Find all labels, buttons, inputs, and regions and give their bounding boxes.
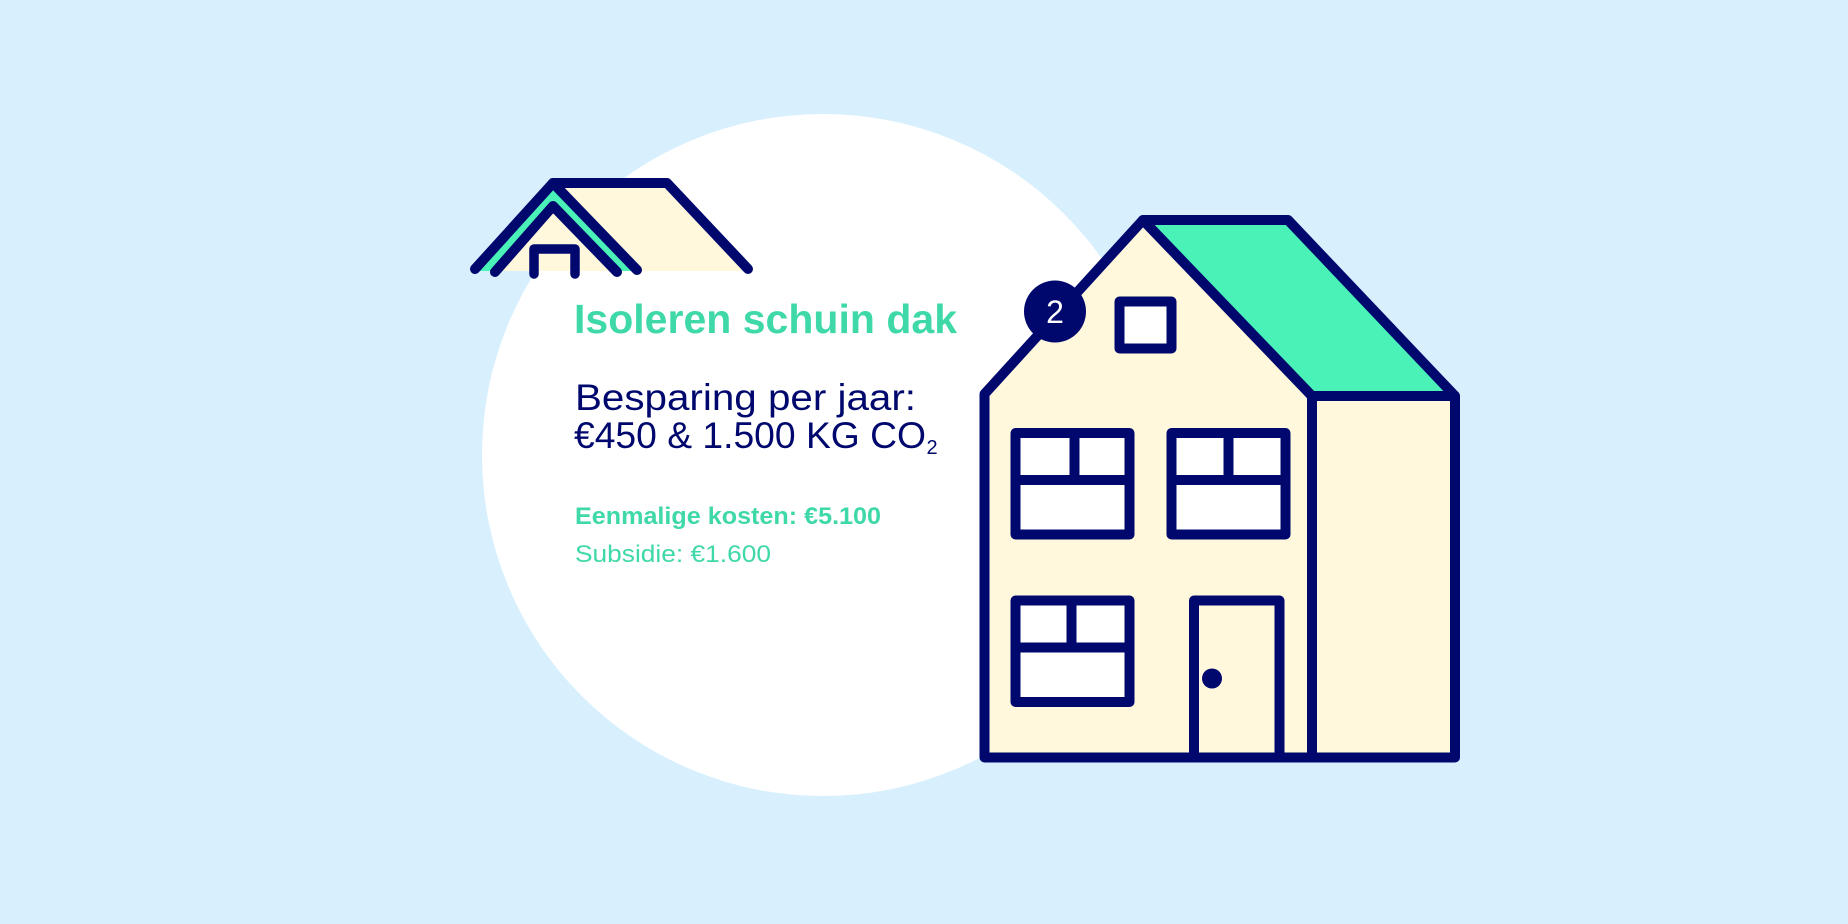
- savings per year: €450 & 1.500 KG CO: [574, 415, 926, 456]
- subsidy: Subsidie: €1.600: [575, 541, 771, 568]
- savings per year: Besparing per jaar:: [575, 377, 916, 418]
- wall divider: [1307, 396, 1317, 758]
- door: [1194, 600, 1280, 758]
- one-off costs: Eenmalige kosten: €5.100: [575, 503, 881, 530]
- savings per year: 2: [926, 437, 938, 459]
- window lower left: [1016, 600, 1130, 702]
- number badge: 2: [1046, 294, 1064, 330]
- illustration: house: [984, 220, 1455, 758]
- icon: sloped roof insulation: [475, 183, 748, 274]
- number badge: [1024, 280, 1086, 342]
- savings per year: [574, 377, 938, 459]
- window upper left: [1016, 433, 1130, 534]
- background circle: [482, 114, 1164, 796]
- green sloped roof: [1143, 220, 1455, 396]
- house walls: [984, 220, 1455, 758]
- heading: Isoleren schuin dak: [574, 296, 957, 342]
- window upper right: [1172, 433, 1286, 534]
- attic window: [1120, 302, 1172, 348]
